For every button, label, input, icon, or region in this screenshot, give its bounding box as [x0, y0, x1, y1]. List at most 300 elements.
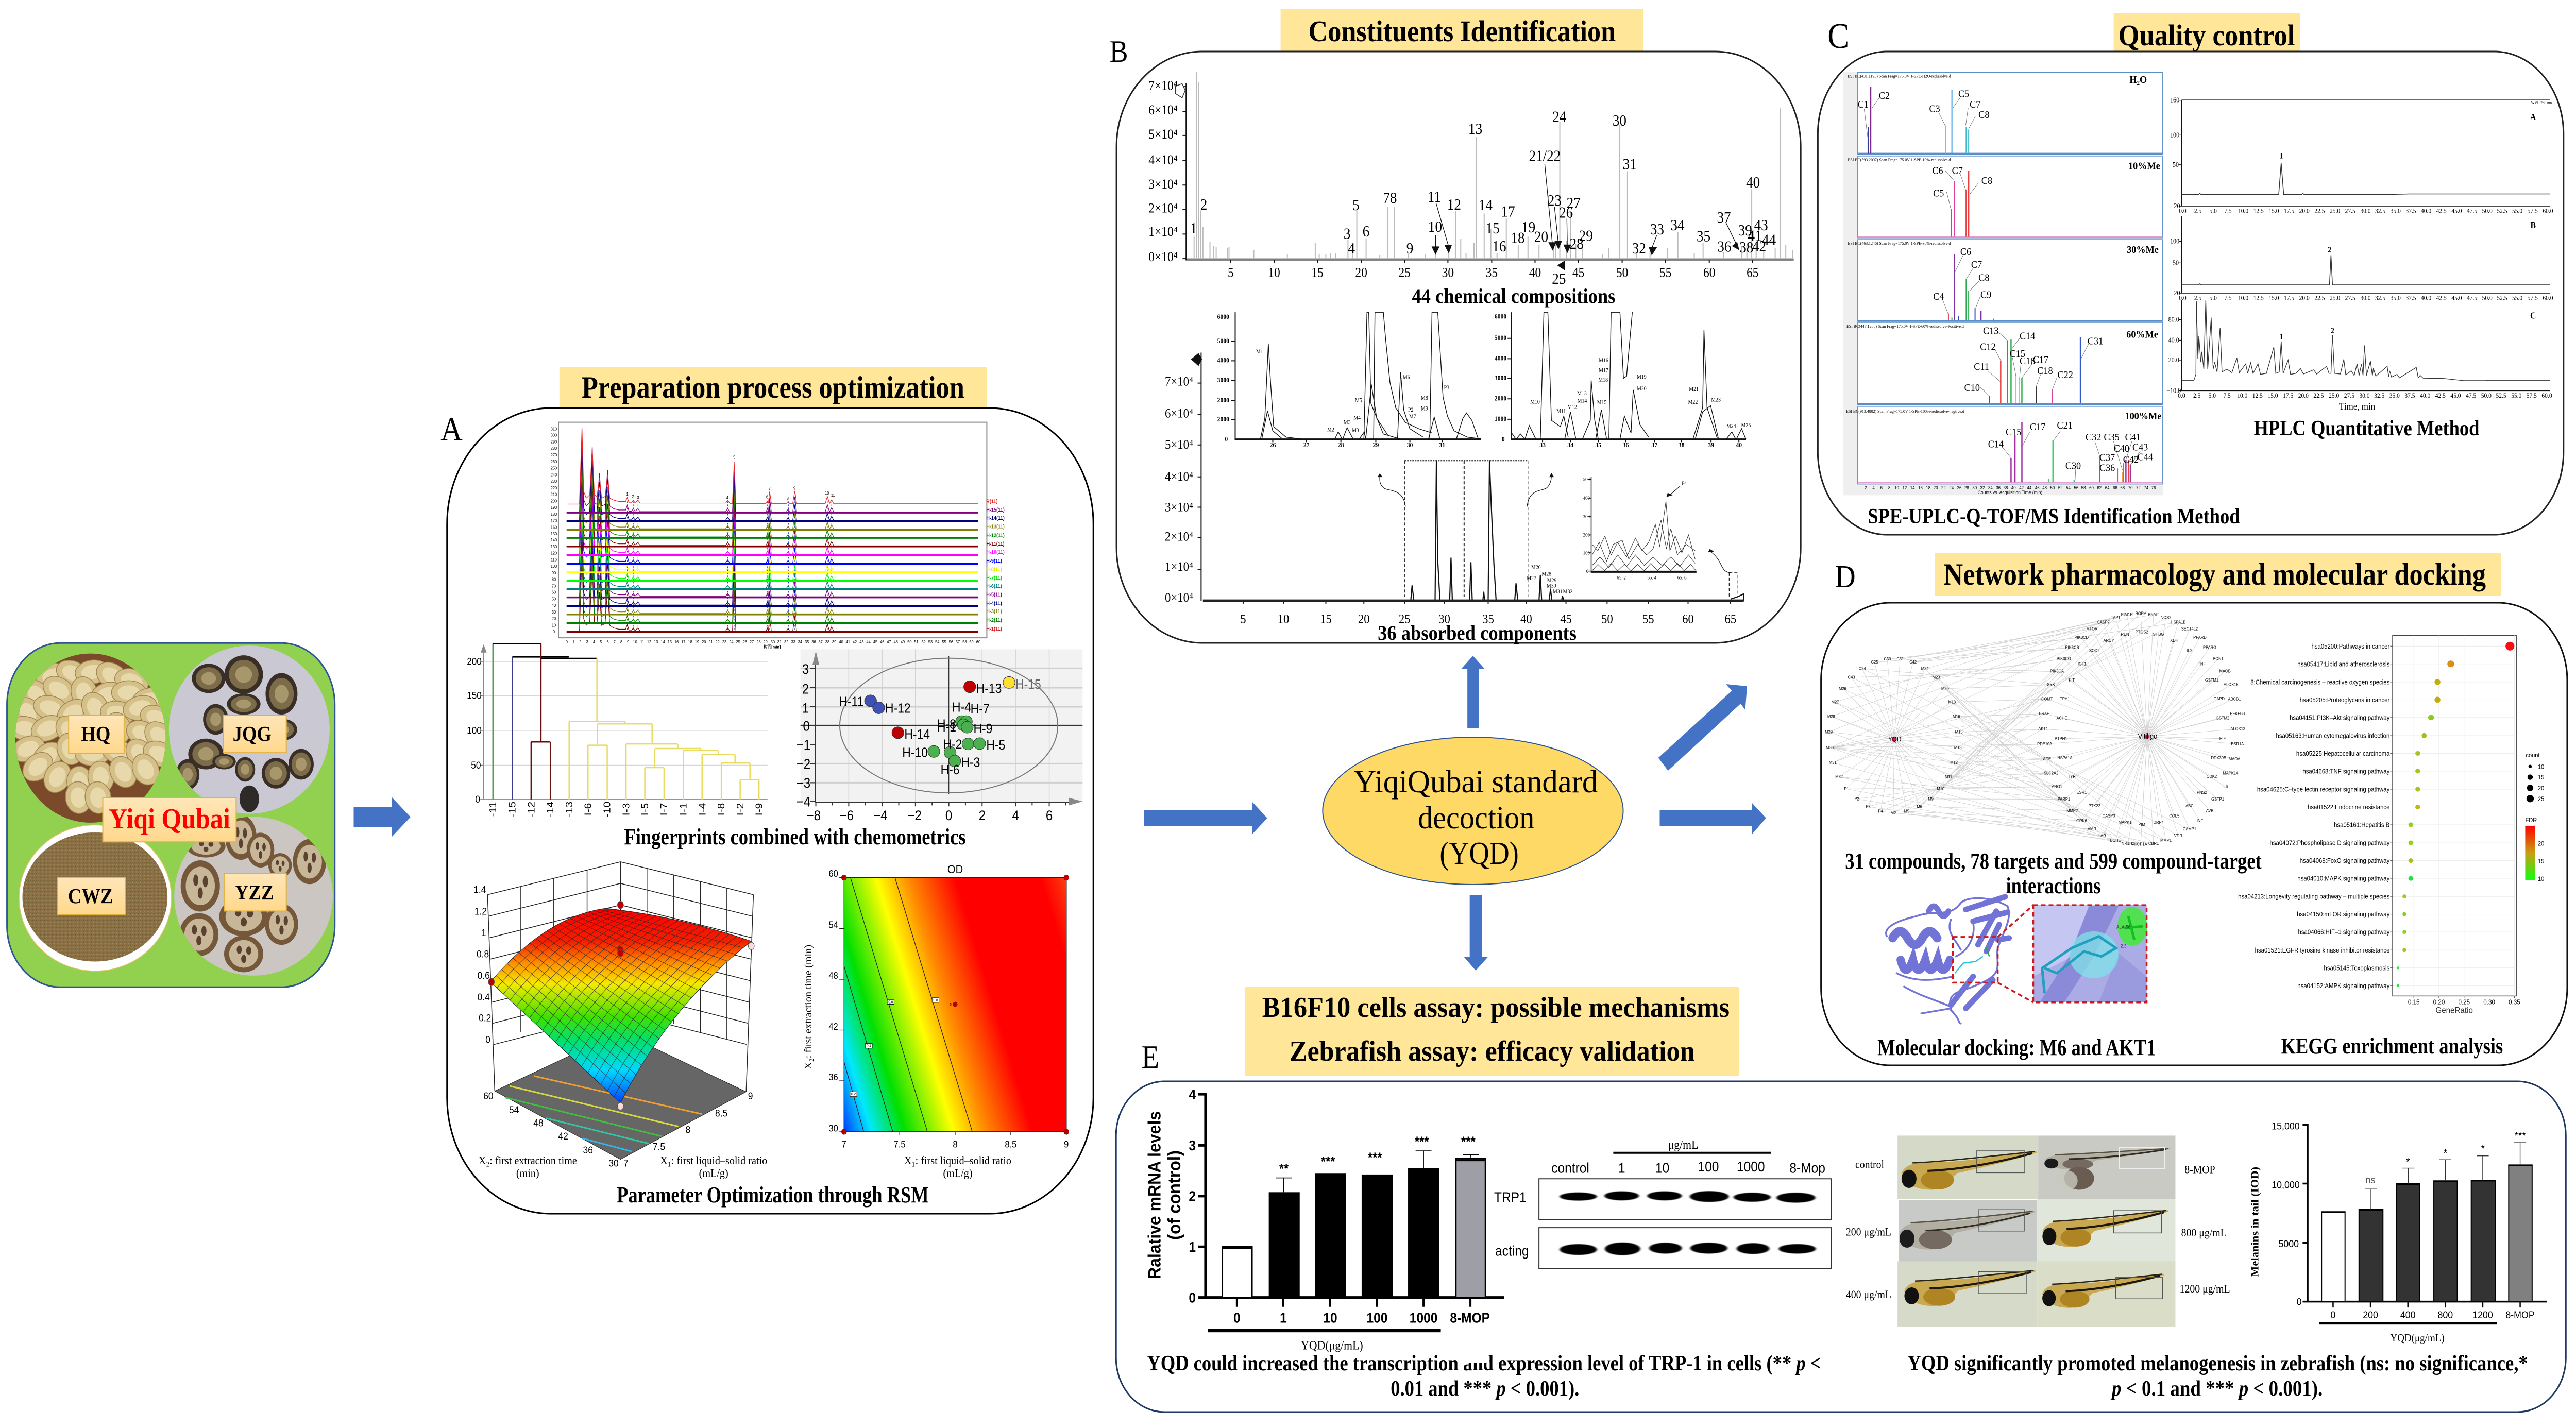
chart: compound-target network: CAMP1	[2183, 827, 2197, 831]
chart: compound-target network: HIF	[2219, 736, 2226, 741]
dendrogram sample labels: I-7	[659, 803, 670, 815]
figure: zebrafish micrographs	[1846, 1135, 2230, 1327]
occlusion over caption word	[1464, 1356, 1489, 1363]
HPLC trace A: 1	[2279, 151, 2283, 161]
chart: fingerprint chromatograms: 10	[825, 491, 829, 496]
figure: western blot TRP1 and acting: 8-Mop	[1789, 1160, 1825, 1176]
inset: 25-32 min chromatogram: P2	[1408, 407, 1414, 413]
chart: compound-target network: KIT	[2069, 678, 2075, 683]
chart: 44 chemical compositions TIC: 26	[1559, 204, 1573, 222]
HPLC trace C: 27.5	[2344, 392, 2354, 399]
chart: compound-target network: M2	[1891, 810, 1896, 815]
inset: 32-40 min chromatogram: 3000	[1495, 374, 1506, 382]
chart: 44 chemical compositions TIC: 40	[1529, 266, 1541, 280]
chart: fingerprint chromatograms: 19	[695, 640, 699, 644]
chart: melanin in tail bar chart: 15,000	[2272, 1120, 2300, 1132]
chart: compound-target network: M18	[1948, 700, 1956, 705]
inset: 32-40 min chromatogram: 36	[1623, 441, 1629, 449]
chart: compound-target network: CASP3	[2103, 813, 2115, 819]
chart: RSM 3D response surface: X₁: first liquid–solid ratio	[660, 1154, 767, 1167]
chart: KEGG enrichment dot plot: hsa05145:Toxoplasmosis	[2324, 964, 2389, 972]
HPLC trace C: 40.0	[2168, 336, 2179, 344]
caption: 31 compounds, 78 targets and 599 compound-target interactions: interactions	[2006, 874, 2101, 899]
legend: count and FDR: 10	[2538, 763, 2545, 770]
HPLC trace B: −20	[2171, 290, 2180, 297]
HPLC trace A: 2.5	[2194, 207, 2201, 215]
inset: 65 min P4 noise	[1583, 477, 1697, 581]
inset: 32-40 min chromatogram: M13	[1577, 391, 1587, 397]
chart: fingerprint chromatograms: 11	[831, 492, 835, 498]
chart: RSM contour plot: 0.2	[851, 1093, 856, 1096]
chart: fingerprint chromatograms: H-1(11)	[986, 626, 1002, 632]
chart: fingerprint chromatograms: 8	[787, 496, 789, 501]
chart: fingerprint chromatograms: H-8(11)	[986, 567, 1002, 573]
HPLC trace A: 55.0	[2512, 207, 2522, 215]
inset: 32-40 min chromatogram: 1000	[1495, 415, 1506, 422]
chart: fingerprint chromatograms: 0	[553, 630, 555, 634]
chart: compound-target network: ARG1	[2052, 784, 2062, 789]
chart: melanin in tail bar chart: 1200	[2472, 1309, 2493, 1320]
HPLC trace B	[2170, 216, 2553, 302]
chart: RSM 3D response surface: 0.8	[477, 948, 489, 960]
HPLC trace C: 10.0	[2237, 392, 2247, 399]
fraction: 60%Me: C11	[1974, 361, 1989, 372]
HPLC trace A: 20.0	[2299, 207, 2310, 215]
fraction: 100%Me: 8	[1888, 485, 1891, 490]
chart: compound-target network: TAP1	[2111, 615, 2121, 620]
chart: 44 chemical compositions TIC: 28	[1570, 235, 1584, 252]
figure: western blot TRP1 and acting: control	[1551, 1160, 1589, 1176]
HPLC trace A: WVL:280 nm	[2531, 100, 2552, 105]
chart: compound-target network: M6	[1917, 804, 1922, 809]
label: YZZ: YZZ	[235, 881, 274, 905]
inset: 32-40 min chromatogram: M19	[1637, 375, 1647, 380]
chart: fingerprint chromatograms: 7	[614, 640, 616, 644]
inset: 25-32 min chromatogram: 26	[1270, 441, 1276, 449]
chart: fingerprint chromatograms	[551, 422, 1005, 650]
fish: 800 ug/mL	[2042, 1210, 2168, 1247]
HPLC trace A: A	[2530, 112, 2536, 122]
chart: fingerprint chromatograms: 14	[660, 640, 665, 644]
HPLC trace A	[2170, 96, 2553, 215]
central ellipse: YiqiQubai standard decoction (YQD): YiqiQubai standard	[1353, 764, 1598, 800]
chart: RSM 3D response surface: (min)	[516, 1167, 539, 1180]
title: B16F10 cells assay and Zebrafish assay: Zebrafish assay: efficacy validation	[1290, 1035, 1695, 1067]
chart: 44 chemical compositions TIC: 43	[1754, 217, 1768, 234]
chart: 44 chemical compositions TIC: 17	[1501, 203, 1515, 220]
chart: compound-target network: PTGS2	[2136, 630, 2148, 635]
chart: 44 chemical compositions TIC: 30	[1442, 266, 1454, 280]
chart: RSM 3D response surface: 36	[583, 1144, 593, 1155]
chart: compound-target network: GRK6	[2076, 818, 2087, 823]
chart: compound-target network: ABCB1	[2228, 696, 2241, 702]
chart: compound-target network: C42	[1909, 660, 1917, 665]
chart: melanin in tail bar chart: 8-MOP	[2505, 1309, 2535, 1320]
chart: melanin in tail bar chart	[2272, 1120, 2547, 1344]
chart: PCA score plot: H-5	[986, 738, 1005, 753]
fraction: 60%Me: C12	[1980, 342, 1996, 353]
chart: RSM 3D response surface: 8	[686, 1124, 690, 1135]
chart: RSM 3D response surface: 0.2	[479, 1012, 491, 1024]
title: Constituents Identification	[1281, 9, 1643, 52]
chart: compound-target network: PPARD	[2193, 635, 2207, 640]
herb photo: YZZ	[174, 815, 333, 977]
chart: 44 chemical compositions TIC: 6	[1363, 223, 1369, 241]
inset: 32-40 min chromatogram: M11	[1556, 409, 1566, 415]
HPLC trace C: 37.5	[2404, 392, 2415, 399]
caption: melanogenesis in zebrafish	[1907, 1351, 2528, 1400]
fraction: 100%Me: C40	[2114, 443, 2129, 454]
chart: fingerprint chromatograms: 9	[793, 486, 795, 491]
fraction: 100%Me: 60	[2089, 485, 2094, 490]
zoomed binding pocket	[2033, 905, 2147, 1002]
chart: SPE-UPLC-Q-TOF/MS fractions	[1843, 72, 2163, 495]
chart: PCA score plot: 2	[802, 682, 809, 697]
axis title: melanins in tail: Melanins in tail (IOD)	[2249, 1167, 2261, 1277]
HPLC trace C: 47.5	[2466, 392, 2476, 399]
chart: compound-target network: PIK3CA	[2050, 669, 2064, 674]
fraction: 100%Me: 34	[1988, 485, 1993, 490]
chart: compound-target network: C30	[1884, 657, 1891, 661]
chart: 44 chemical compositions TIC: 30	[1613, 112, 1626, 129]
chart: RSM contour plot: 48	[828, 970, 838, 981]
inset: 32-40 min chromatogram: M17	[1599, 368, 1608, 374]
fraction: 10%Me: C6	[1932, 165, 1943, 177]
chart: fingerprint chromatograms: H-10(11)	[986, 549, 1005, 555]
figure: western blot TRP1 and acting: 1000	[1737, 1159, 1765, 1175]
illustration: molecular docking of M6 and AKT1	[1886, 897, 2147, 1024]
fraction: 100%Me: 52	[2058, 485, 2063, 490]
chart: compound-target network: PNS2	[2197, 790, 2207, 795]
main chromatogram: absorbed components: 25	[1399, 612, 1411, 626]
chart: compound-target network: COMT	[2041, 696, 2053, 702]
figure: western blot TRP1 and acting: 1	[1618, 1160, 1625, 1176]
chart: 44 chemical compositions TIC: 14	[1479, 197, 1493, 214]
chart: 44 chemical compositions TIC: 5	[1228, 266, 1234, 280]
chart: compound-target network: MMP2	[2066, 808, 2078, 813]
chart: RSM 3D response surface: 0	[485, 1034, 490, 1045]
HPLC trace A: 22.5	[2314, 207, 2325, 215]
HPLC trace C: 55.0	[2511, 392, 2521, 399]
chart: relative mRNA levels bar chart: **	[1279, 1162, 1289, 1177]
chart: fingerprint chromatograms: 23	[722, 640, 727, 644]
chart: fingerprint chromatograms: 4	[593, 640, 596, 644]
main chromatogram: absorbed components: M26	[1531, 565, 1541, 571]
panel: Yiqi Qubai herbal ingredients	[6, 643, 335, 987]
chart: compound-target network: AKT1	[2038, 726, 2048, 732]
fraction: 100%Me: 32	[1980, 485, 1985, 490]
main chromatogram: absorbed components: M28	[1541, 571, 1551, 577]
fraction: 100%Me: 70	[2128, 485, 2133, 490]
panel: constituents identification outline	[1116, 52, 1801, 643]
docking ligand in protein	[1955, 957, 1983, 973]
chart: melanin in tail bar chart: ***	[2515, 1130, 2526, 1142]
caption: HPLC Quantitative Method: HPLC Quantitative Method	[2254, 416, 2479, 440]
fraction: 30%Me: C6	[1960, 246, 1971, 258]
chart: RSM contour plot: 7.5	[894, 1139, 906, 1150]
title: Preparation process optimization: Preparation process optimization	[582, 370, 964, 405]
herb photo: HQ	[15, 653, 166, 823]
chart: melanin in tail bar chart: 0	[2330, 1309, 2335, 1320]
chart: 44 chemical compositions TIC: 60	[1703, 266, 1715, 280]
chart: 44 chemical compositions TIC: 37	[1717, 209, 1731, 226]
HPLC trace A: 15.0	[2268, 207, 2279, 215]
chart: compound-target network: PNMT	[2148, 612, 2159, 617]
chart: RSM contour plot: 8.5	[1005, 1139, 1016, 1150]
chart: RSM 3D response surface: 1.4	[473, 884, 486, 895]
chart: fingerprint chromatograms: H-11(11)	[986, 541, 1005, 547]
chart: melanin in tail bar chart: *	[2406, 1156, 2410, 1168]
fraction: 100%Me: C21	[2057, 420, 2073, 431]
fraction: 100%Me: 24	[1949, 485, 1954, 490]
chart: RSM contour plot: 36	[828, 1072, 838, 1082]
inset: 32-40 min chromatogram: 34	[1567, 441, 1573, 449]
chart: melanin in tail bar chart: *	[2481, 1143, 2485, 1155]
caption: TRP-1 transcription and expression: YQD could increased the transcription and expression level of TRP-1 in cells (** p <	[1147, 1351, 1821, 1375]
chart: compound-target network: PDE10A	[2037, 741, 2053, 746]
chart: RSM 3D response surface: (mL/g)	[699, 1167, 728, 1180]
chart: fingerprint chromatograms: 220	[551, 485, 557, 490]
HPLC trace B: 37.5	[2405, 294, 2416, 302]
chart: compound-target network: BCHE	[2110, 838, 2121, 843]
chart: 44 chemical compositions TIC: 41	[1748, 227, 1762, 245]
chart: RSM 3D response surface: 7	[623, 1157, 629, 1168]
HPLC trace C: 40.0	[2420, 392, 2430, 399]
chart: PCA score plot: −1	[796, 738, 810, 753]
chart: fingerprint chromatograms: H-4(11)	[986, 601, 1002, 606]
chart: compound-target network: C43	[1848, 675, 1855, 679]
chart: compound-target network: CASP7	[2097, 620, 2110, 625]
HPLC trace A: 52.5	[2497, 207, 2507, 215]
chart: compound-target network: ARCY	[2104, 638, 2114, 643]
fraction: 100%Me: 26	[1957, 485, 1962, 490]
chart: relative mRNA levels bar chart: YQD(μg/mL)	[1301, 1338, 1363, 1352]
zoomed binding pocket: 2.3	[2121, 943, 2126, 949]
chart: KEGG enrichment dot plot: hsa05225:Hepatocellular carcinoma	[2296, 750, 2390, 757]
caption: TRP-1 transcription and expression: 0.01 and *** p < 0.001).	[1391, 1376, 1579, 1400]
chart: KEGG enrichment dot plot: hsa05205:Proteoglycans in cancer	[2300, 696, 2389, 704]
herb photo: CWZ	[19, 825, 172, 971]
fraction: 60%Me	[1846, 322, 2162, 405]
chart: fingerprint chromatograms: 56	[949, 640, 954, 644]
fraction: H2O: H₂O	[2129, 74, 2147, 86]
main chromatogram: absorbed components: M27	[1527, 576, 1536, 582]
fraction: 100%Me: 62	[2097, 485, 2102, 490]
chart: 44 chemical compositions TIC: 1	[1190, 220, 1197, 237]
chart: PCA score plot: −4	[873, 808, 888, 823]
arrow: YQD to constituents	[1462, 656, 1484, 728]
HPLC trace C: 57.5	[2527, 392, 2537, 399]
chart: fingerprint chromatograms: 49	[901, 640, 905, 644]
chart: fingerprint chromatograms: 230	[551, 479, 557, 484]
chart: fingerprint chromatograms: 120	[551, 551, 557, 556]
chart: fingerprint chromatograms: 5	[733, 455, 736, 460]
inset: 32-40 min chromatogram: 37	[1651, 441, 1657, 449]
legend: count and FDR: FDR	[2525, 817, 2537, 824]
inset: 25-32 min chromatogram: 29	[1373, 441, 1379, 449]
fraction: 60%Me: 60%Me	[2126, 329, 2158, 341]
caption: 31 compounds, 78 targets and 599 compound-target interactions: 31 compounds, 78 targets and 599 compound-target	[1845, 849, 2262, 874]
inset: 65 min P4 noise: 100	[1583, 551, 1590, 556]
chart: 44 chemical compositions TIC: 78	[1383, 190, 1397, 207]
caption: Fingerprints combined with chemometrics: Fingerprints combined with chemometrics	[624, 825, 966, 850]
chart: compound-target network: M5	[1904, 809, 1910, 814]
chart: compound-target network: GSTM2	[2216, 716, 2230, 721]
chart: PCA score plot: −2	[907, 808, 922, 823]
chart: fingerprint chromatograms: 46	[880, 640, 885, 644]
main chromatogram: absorbed components: 0×10⁴	[1165, 591, 1193, 605]
inset: 25-32 min chromatogram: 3000	[1217, 376, 1229, 384]
fraction: 10%Me	[1848, 156, 2162, 238]
HPLC trace B: 42.5	[2436, 294, 2447, 302]
chart: RSM 3D response surface: 60	[483, 1090, 494, 1101]
chart: KEGG enrichment dot plot: hsa04625:C–type lectin receptor signaling pathway	[2257, 786, 2389, 793]
legend: count and FDR: 20	[2538, 785, 2545, 792]
HPLC trace C: 80.0	[2168, 316, 2179, 324]
HPLC trace C: 50.0	[2481, 392, 2492, 399]
fraction: 100%Me: 30	[1972, 485, 1977, 490]
inset: 25-32 min chromatogram: M3	[1344, 420, 1351, 426]
chart: PCA score plot: 3	[802, 662, 809, 677]
HPLC trace A: 160	[2170, 96, 2179, 104]
inset: 25-32 min chromatogram: 31	[1439, 441, 1445, 449]
label: Yiqi Qubai: Yiqi Qubai	[109, 803, 230, 835]
HPLC trace B: 50.0	[2482, 294, 2493, 302]
HPLC trace A: 37.5	[2405, 207, 2416, 215]
inset: 25-32 min chromatogram: M4	[1353, 415, 1361, 421]
chart: KEGG enrichment dot plot: hsa01522:Endocrine resistance	[2308, 803, 2390, 811]
HPLC trace A: 40.0	[2421, 207, 2431, 215]
figure: zebrafish micrographs: 1200 μg/mL	[2180, 1282, 2230, 1295]
chart: relative mRNA levels bar chart: 0	[1233, 1310, 1241, 1326]
inset: 32-40 min chromatogram: 0	[1502, 435, 1505, 443]
chart: RSM contour plot: 9	[1064, 1139, 1069, 1150]
legend: count and FDR: 10	[2538, 876, 2545, 882]
chart: fingerprint chromatograms: 7	[769, 486, 771, 491]
chart: KEGG enrichment dot plot: 0.30	[2483, 998, 2495, 1006]
chart: KEGG enrichment dot plot: 0.25	[2458, 998, 2470, 1006]
fraction: 100%Me: 12	[1902, 485, 1907, 490]
inset: 65 min P4 noise: P4	[1682, 481, 1687, 486]
chart: fingerprint chromatograms: 60	[552, 590, 556, 595]
fraction: 10%Me: C5	[1933, 188, 1944, 199]
herb photo: JQG	[168, 644, 331, 815]
central ellipse: YiqiQubai standard decoction (YQD)	[1323, 737, 1623, 885]
chart: fingerprint chromatograms: 37	[819, 640, 823, 644]
chart: fingerprint chromatograms: 2	[632, 494, 634, 499]
HPLC trace B: 100	[2170, 237, 2179, 245]
HPLC trace C: 15.0	[2267, 392, 2278, 399]
chart: 44 chemical compositions TIC: 34	[1670, 217, 1684, 234]
fraction: 60%Me: C13	[1983, 325, 1998, 337]
chart: 44 chemical compositions TIC: 31	[1623, 156, 1637, 173]
HPLC trace A: −20	[2171, 202, 2180, 210]
chart: compound-target network: C31	[1896, 657, 1904, 661]
main chromatogram: absorbed components: 45	[1560, 612, 1572, 626]
HPLC trace B: 10.0	[2238, 294, 2248, 302]
fraction: H2O: C7	[1970, 99, 1981, 110]
chart: 44 chemical compositions TIC: 4	[1348, 240, 1355, 257]
chart: hierarchical clustering dendrogram	[467, 644, 768, 805]
chart: 44 chemical compositions TIC: 15	[1486, 220, 1500, 237]
chart: compound-target network: ACHE	[2056, 716, 2067, 721]
fraction: H2O: C8	[1978, 109, 1989, 121]
chart: KEGG enrichment dot plot: hsa04066:HIF–1 signaling pathway	[2298, 928, 2389, 936]
chart: 44 chemical compositions TIC: 10	[1268, 266, 1280, 280]
HPLC trace B: 60.0	[2543, 294, 2553, 302]
inset: 25-32 min chromatogram: P3	[1444, 385, 1449, 391]
chart: 36 absorbed components with zoomed insets	[1165, 312, 1751, 626]
chart: compound-target network: RORA	[2135, 611, 2147, 616]
figure: zebrafish micrographs: 200 μg/mL	[1846, 1226, 1891, 1238]
inset: 25-32 min chromatogram: 2000	[1217, 415, 1229, 423]
chart: fingerprint chromatograms: 34	[798, 640, 803, 644]
HPLC trace C: 25.0	[2329, 392, 2339, 399]
caption: SPE-UPLC-Q-TOF/MS Identification Method: SPE-UPLC-Q-TOF/MS Identification Method	[1868, 504, 2240, 528]
chart: compound-target network: TNF	[2198, 661, 2206, 666]
chart: PCA score plot: 6	[1046, 808, 1053, 823]
chart: 44 chemical compositions TIC: 25	[1552, 270, 1566, 287]
chart: compound-target network: GSTM1	[2205, 678, 2219, 683]
arrow: YQD to quality control	[1658, 684, 1747, 771]
fraction: 100%Me: Counts vs. Acquisition Time (min)	[1978, 490, 2042, 495]
main chromatogram: absorbed components	[1165, 352, 1744, 626]
chart: fingerprint chromatograms: 31	[777, 640, 782, 644]
chart: 44 chemical compositions TIC: 23	[1548, 192, 1562, 210]
title: Quality control: Quality control	[2119, 19, 2295, 52]
inset: 65 min P4 noise: 500	[1583, 477, 1590, 483]
chart: fingerprint chromatograms: H-15(11)	[986, 507, 1005, 513]
chart: fingerprint chromatograms: 35	[805, 640, 809, 644]
chart: compound-target network: ALOX12	[2230, 726, 2246, 732]
chart: fingerprint chromatograms: 59	[969, 640, 974, 644]
caption: melanogenesis in zebrafish: p < 0.1 and *** p < 0.001).	[2110, 1376, 2323, 1400]
chart: compound-target network: INF	[2197, 818, 2203, 823]
label: HQ	[69, 715, 124, 753]
chart: PCA score plot: H-2	[943, 738, 962, 752]
fraction: 100%Me: 48	[2042, 485, 2047, 490]
fraction: 100%Me: 38	[2004, 485, 2008, 490]
chart: HPLC quantitative chromatograms	[2166, 96, 2553, 412]
fraction: 30%Me: 30%Me	[2127, 244, 2159, 256]
chart: fingerprint chromatograms: 29	[763, 640, 768, 644]
chart: 44 chemical compositions TIC: 0×10⁴	[1148, 250, 1178, 264]
label: D: D	[1835, 559, 1856, 594]
chart: RSM contour plot: 60	[828, 868, 838, 879]
chart: fingerprint chromatograms: 280	[551, 446, 557, 451]
fraction: 100%Me: 56	[2074, 485, 2079, 490]
chart: fingerprint chromatograms: 36	[811, 640, 816, 644]
chart: fingerprint chromatograms: 22	[716, 640, 720, 644]
figure: western blot TRP1 and acting: acting	[1495, 1243, 1529, 1259]
fraction: 100%Me: 100%Me	[2125, 411, 2162, 422]
inset: 25-32 min chromatogram: 2000	[1217, 397, 1229, 404]
chart: compound-target network: TYR	[2068, 774, 2076, 779]
chart: compound-target network: P4	[1878, 809, 1883, 814]
main chromatogram: absorbed components: 3×10⁴	[1165, 500, 1193, 515]
chart: 44 chemical compositions TIC: 10	[1428, 218, 1442, 236]
HPLC trace A: 50.0	[2482, 207, 2493, 215]
fraction: 100%Me: 10	[1894, 485, 1899, 490]
fraction: 60%Me: C17	[2033, 354, 2048, 366]
chart: PCA score plot: −2	[796, 757, 810, 772]
chart: RSM contour plot: 0.4	[867, 1044, 871, 1048]
main chromatogram: absorbed components: 5	[1240, 612, 1246, 626]
chart: PCA score plot: −6	[840, 808, 854, 823]
label: CWZ	[57, 877, 126, 915]
chart: fingerprint chromatograms: 150	[551, 532, 557, 536]
chart: fingerprint chromatograms: 57	[956, 640, 960, 644]
